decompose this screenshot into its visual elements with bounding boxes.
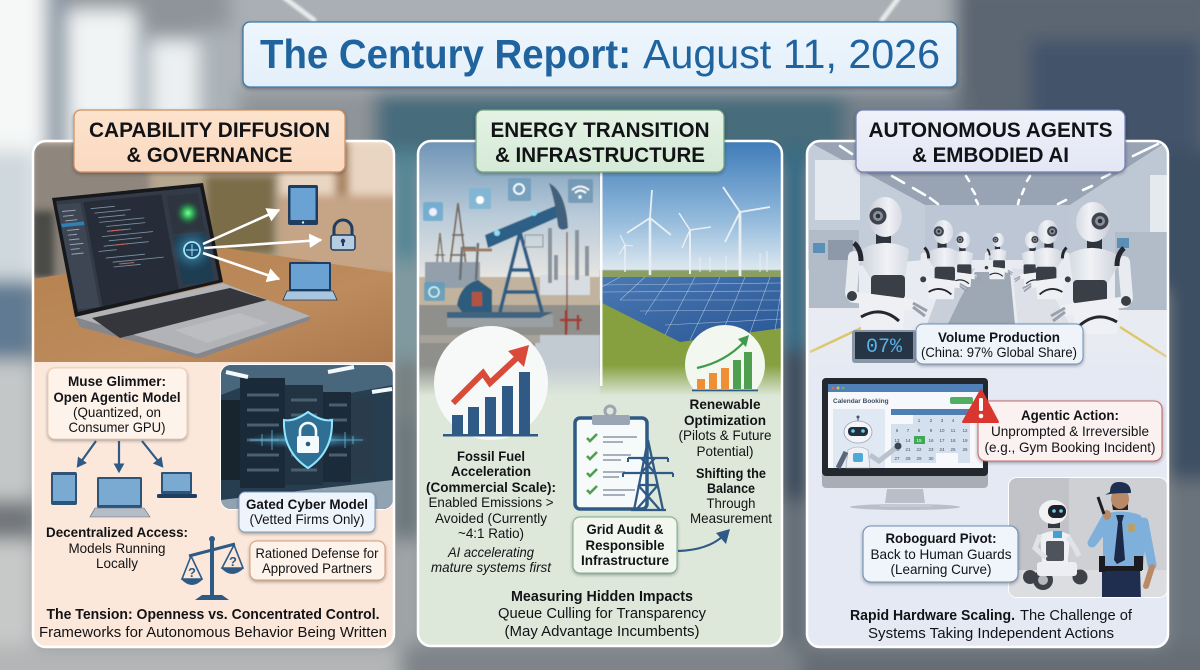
callout: agentic action: Agentic Action:: [1021, 407, 1119, 423]
text: decentralized access: Locally: [96, 555, 138, 571]
arrows from laptop to devices: [203, 210, 321, 279]
monitor: calendar booking screen: 19: [962, 438, 968, 443]
photo: robot factory: [807, 141, 1168, 377]
monitor: calendar booking screen: 18: [950, 438, 956, 443]
callout: grid audit: Infrastructure: [581, 552, 669, 568]
text: fossil fuel acceleration: Acceleration: [451, 463, 531, 479]
text: measuring hidden impacts: Queue Culling for Transparency: [498, 605, 706, 622]
text: the tension summary: Frameworks for Autonomous Behavior Being Written: [39, 624, 387, 641]
text: rapid hardware scaling summary: Rapid Hardware Scaling.: [850, 607, 1015, 624]
monitor: calendar booking screen: Calendar Booking: [833, 398, 889, 405]
text: fossil fuel acceleration: [426, 448, 556, 575]
title banner: August 11, 2026: [643, 31, 940, 77]
heading: energy transition: & INFRASTRUCTURE: [495, 143, 705, 167]
monitor: calendar booking screen: 16: [928, 438, 934, 443]
monitor: calendar booking screen: 7: [907, 428, 910, 433]
callout: roboguard pivot: [863, 526, 1018, 582]
text: measuring hidden impacts: (May Advantage Incumbents): [504, 623, 700, 640]
desk and room photo background: [30, 141, 400, 370]
text: fossil fuel acceleration: AI accelerating: [447, 544, 534, 560]
text: measuring hidden impacts: Measuring Hidden Impacts: [511, 588, 693, 605]
icon: balance scales: ?: [229, 554, 237, 569]
callout: Muse Glimmer: Consumer GPU): [68, 419, 166, 435]
text: renewable optimization: Potential): [696, 443, 754, 459]
monitor: calendar booking screen: 1: [918, 418, 921, 423]
callout: rationed defense: Approved Partners: [262, 560, 372, 576]
text: decentralized access: Models Running: [68, 540, 166, 556]
icon: clipboard checklist and pylon: [575, 406, 673, 510]
callout: grid audit: Responsible: [586, 537, 665, 553]
text: decentralized access: [46, 524, 188, 571]
display: 97 percent digital readout: 07%: [866, 336, 903, 359]
callout: roboguard pivot: Roboguard Pivot:: [886, 530, 996, 546]
callout: grid audit: Grid Audit &: [586, 521, 664, 537]
monitor: calendar booking screen: 12: [962, 428, 968, 433]
heading: autonomous agents: [856, 110, 1125, 172]
robot on wheels: [1023, 500, 1088, 590]
callout: agentic action: [978, 401, 1162, 461]
callout: rationed defense: Rationed Defense for: [256, 545, 379, 561]
icon: warning triangle: [963, 390, 998, 422]
title banner: [243, 22, 957, 87]
arrow: grid audit to shifting balance: [678, 529, 730, 551]
photo: roboguard and human guard: [1008, 477, 1168, 600]
icon: small laptop: [157, 472, 197, 498]
ceiling light streaks: [282, 0, 900, 20]
text: shifting the balance: Through: [706, 495, 756, 511]
text: fossil fuel acceleration: (Commercial Scale):: [426, 479, 556, 495]
text: the tension summary: The Tension: Openness vs. Concentrated Control.: [46, 606, 380, 623]
text: rapid hardware scaling summary: Systems Taking Independent Actions: [868, 625, 1114, 642]
display: 97 percent digital readout: [852, 330, 916, 363]
monitor: calendar booking screen: 2: [930, 418, 933, 423]
monitor: calendar booking screen: 27: [894, 456, 900, 461]
monitor: calendar booking screen: 4: [952, 418, 955, 423]
text: fossil fuel acceleration: Enabled Emissions >: [428, 494, 554, 510]
monitor: calendar booking screen: 24: [939, 447, 945, 452]
monitor: calendar booking screen: 9: [930, 428, 933, 433]
heading: capability diffusion: CAPABILITY DIFFUSION: [89, 118, 330, 142]
text: decentralized access: Decentralized Access:: [46, 524, 188, 540]
callout: Muse Glimmer: Open Agentic Model: [54, 389, 180, 405]
photo: oil refinery and pumpjack: [418, 141, 782, 405]
text: rapid hardware scaling summary: [850, 607, 1133, 642]
callout: volume production: (China: 97% Global Share): [921, 344, 1077, 360]
text: shifting the balance: [690, 465, 772, 526]
monitor: calendar booking screen: 11: [951, 428, 956, 433]
callout: gated cyber model: Gated Cyber Model: [246, 496, 368, 512]
monitor: calendar booking screen: 30: [928, 456, 934, 461]
callout: Muse Glimmer: Muse Glimmer:: [68, 373, 166, 389]
callout: agentic action: Unprompted & Irreversible: [991, 423, 1149, 439]
text: renewable optimization: (Pilots & Future: [678, 427, 772, 443]
monitor: calendar booking screen: 13: [894, 438, 900, 443]
icon: fossil fuel chart: [434, 326, 548, 440]
icon: balance scales: ?: [188, 565, 196, 580]
callout: roboguard pivot: Back to Human Guards: [870, 546, 1012, 562]
callout: roboguard pivot: (Learning Curve): [890, 561, 992, 577]
callout: rationed defense: [250, 541, 385, 580]
text: shifting the balance: Balance: [707, 480, 755, 496]
icon: local tablet: [51, 472, 77, 505]
icon: screen robot: [838, 416, 902, 468]
panel: energy transition and infrastructure: [418, 110, 782, 646]
callout: agentic action: (e.g., Gym Booking Incident): [984, 439, 1156, 455]
monitor: calendar booking screen: 8: [918, 428, 921, 433]
text: renewable optimization: [678, 396, 772, 459]
monitor: calendar booking screen: 15: [916, 438, 922, 443]
monitor: calendar booking screen: 20: [894, 447, 900, 452]
icon: local laptop: [90, 477, 150, 517]
icon: laptop: [283, 262, 337, 300]
panel: autonomous agents and embodied AI: [807, 110, 1168, 647]
callout: volume production: Volume Production: [938, 329, 1060, 345]
title banner: The Century Report:: [260, 31, 631, 77]
monitor: calendar booking screen: 28: [905, 456, 911, 461]
monitor: calendar booking screen: 17: [939, 438, 945, 443]
monitor: calendar booking screen: 25: [950, 447, 956, 452]
text: shifting the balance: Shifting the: [696, 465, 766, 481]
icon: lock: [331, 220, 355, 250]
heading: autonomous agents: & EMBODIED AI: [912, 143, 1069, 167]
photo: server room with shield: [220, 364, 394, 510]
callout: volume production: [916, 324, 1083, 364]
monitor: calendar booking screen: [822, 378, 988, 510]
text: rapid hardware scaling summary: The Challenge of: [1020, 607, 1133, 624]
monitor: calendar booking screen: 22: [916, 447, 922, 452]
callout: grid audit: [573, 517, 677, 573]
monitor: calendar booking screen: 10: [939, 428, 945, 433]
heading: energy transition: ENERGY TRANSITION: [490, 118, 710, 142]
callout: gated cyber model: [239, 492, 375, 532]
wind turbines: [619, 187, 770, 276]
text: shifting the balance: Measurement: [690, 510, 772, 526]
text: fossil fuel acceleration: mature systems first: [431, 559, 552, 575]
callout: Muse Glimmer: [48, 368, 187, 439]
heading: energy transition: [476, 110, 724, 172]
text: renewable optimization: Optimization: [684, 412, 766, 428]
monitor: calendar booking screen: 23: [928, 447, 934, 452]
text: fossil fuel acceleration: Avoided (Currently: [435, 510, 547, 526]
text: the tension summary: [39, 606, 387, 641]
arrows to local devices: [78, 441, 162, 471]
laptop with code editor: [52, 183, 310, 358]
text: measuring hidden impacts: [498, 588, 706, 640]
icon: tablet: [288, 185, 318, 225]
heading: autonomous agents: AUTONOMOUS AGENTS: [868, 118, 1112, 142]
monitor: calendar booking screen: 29: [916, 456, 922, 461]
monitor: calendar booking screen: 21: [905, 447, 911, 452]
monitor: calendar booking screen: 14: [905, 438, 911, 443]
text: fossil fuel acceleration: Fossil Fuel: [457, 448, 525, 464]
heading: capability diffusion: & GOVERNANCE: [126, 143, 292, 167]
heading: capability diffusion: [74, 110, 345, 172]
monitor: calendar booking screen: 6: [896, 428, 899, 433]
human security guard: [1092, 482, 1152, 600]
callout: gated cyber model: (Vetted Firms Only): [250, 511, 364, 527]
text: fossil fuel acceleration: ~4:1 Ratio): [458, 525, 524, 541]
icon: renewable chart: [685, 325, 765, 391]
panel: capability diffusion and governance: [30, 110, 400, 647]
icon: balance scales: [181, 536, 244, 600]
callout: Muse Glimmer: (Quantized, on: [73, 404, 161, 420]
solar panel field: [602, 277, 782, 342]
monitor: calendar booking screen: 3: [941, 418, 944, 423]
monitor: calendar booking screen: 26: [962, 447, 968, 452]
text: renewable optimization: Renewable: [690, 396, 761, 412]
